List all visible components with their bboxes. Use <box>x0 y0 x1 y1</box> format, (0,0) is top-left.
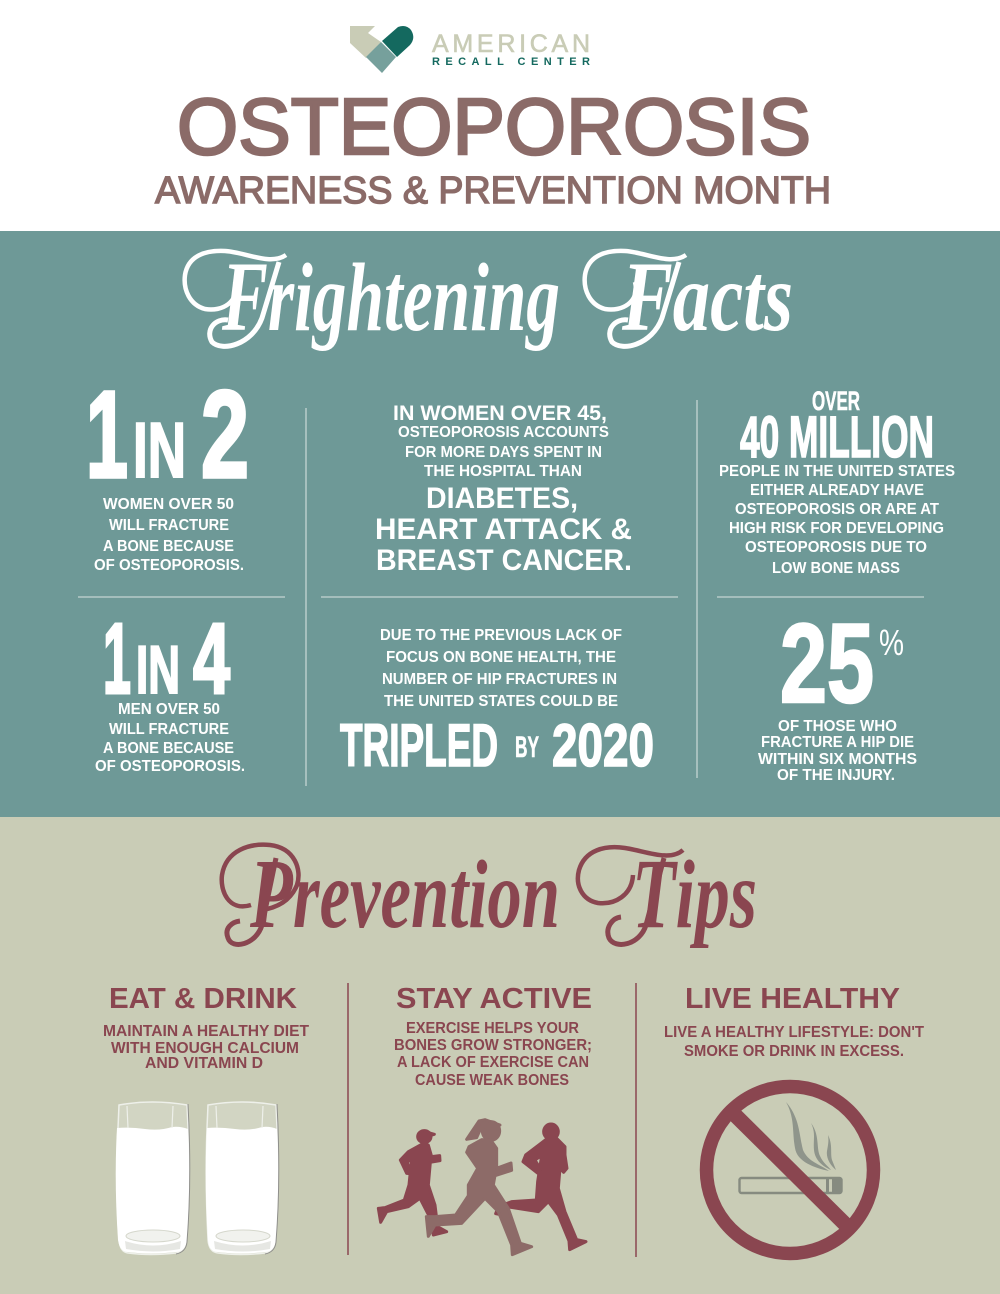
stat: 1 in 4 men: OF OSTEOPOROSIS. <box>95 758 245 775</box>
fact: tripled by 2020: DUE TO THE PREVIOUS LACK OF <box>380 627 622 644</box>
stat: over 40 million: OVER <box>812 386 860 416</box>
stat: 25 percent: WITHIN SIX MONTHS <box>758 751 917 768</box>
stat: 1 in 4 men: WILL FRACTURE <box>109 721 229 738</box>
column: eat and drink: WITH ENOUGH CALCIUM <box>111 1040 299 1057</box>
stat: 25 percent <box>758 601 917 784</box>
logo: American Recall Center: AMERICAN <box>432 30 590 58</box>
fact: tripled by 2020: NUMBER OF HIP FRACTURES IN <box>382 671 617 688</box>
column: stay active: EXERCISE HELPS YOUR <box>406 1020 579 1037</box>
column: live healthy: SMOKE OR DRINK IN EXCESS. <box>684 1043 904 1060</box>
column: eat and drink: MAINTAIN A HEALTHY DIET <box>103 1023 309 1040</box>
heading: Prevention Tips: Tips <box>632 838 757 949</box>
icon: no smoking <box>706 1086 874 1254</box>
fact: hospital days: DIABETES, <box>426 482 578 515</box>
icon: smoke <box>786 1102 836 1171</box>
logo: American Recall Center: RECALL CENTER <box>432 56 590 68</box>
stat: 1 in 4 men: 4 <box>193 603 230 715</box>
fact: tripled by 2020: THE UNITED STATES COULD BE <box>384 693 618 710</box>
stat: 1 in 4 men <box>95 603 245 775</box>
stat: 1 in 2 women: 1 <box>86 367 128 504</box>
stat: 1 in 2 women: WILL FRACTURE <box>109 517 229 534</box>
logo: American Recall Center <box>350 26 590 73</box>
fact: hospital days: HEART ATTACK & <box>375 513 632 546</box>
fact: hospital days <box>375 402 632 577</box>
panel: prevention tips <box>0 817 1000 1294</box>
fact: hospital days: IN WOMEN OVER 45, <box>393 402 607 425</box>
stat: over 40 million: OSTEOPOROSIS OR ARE AT <box>735 501 939 518</box>
icon: runner left <box>378 1131 447 1235</box>
fact: tripled by 2020: TRIPLED <box>340 712 498 779</box>
icon: runner right <box>496 1124 586 1250</box>
column: stay active: CAUSE WEAK BONES <box>415 1072 569 1089</box>
stat: 1 in 4 men: A BONE BECAUSE <box>103 740 234 757</box>
icon: right glass <box>206 1102 279 1254</box>
stat: over 40 million: OSTEOPOROSIS DUE TO <box>745 539 927 556</box>
stat: 25 percent: 25 <box>780 601 874 726</box>
heading: Frightening Facts: Facts <box>621 241 793 352</box>
stat: over 40 million <box>719 386 955 577</box>
fact: hospital days: OSTEOPOROSIS ACCOUNTS <box>398 424 609 441</box>
icon: left glass <box>116 1102 190 1254</box>
stat: 1 in 2 women: 2 <box>201 367 249 504</box>
stat: 25 percent: % <box>879 622 904 663</box>
fact: tripled by 2020: FOCUS ON BONE HEALTH, THE <box>386 649 616 666</box>
subtitle: Awareness and Prevention Month: AWARENESS & PREVENTION MONTH <box>155 170 831 212</box>
column: stay active: BONES GROW STRONGER; <box>394 1037 592 1054</box>
icon: cigarette <box>740 1178 842 1193</box>
column: eat and drink: EAT & DRINK <box>109 983 297 1015</box>
stat: 25 percent: OF THOSE WHO <box>778 718 897 735</box>
stat: over 40 million: HIGH RISK FOR DEVELOPING <box>729 520 944 537</box>
column: live healthy <box>664 983 924 1254</box>
fact: tripled by 2020: 2020 <box>552 712 654 779</box>
stat: 1 in 2 women: A BONE BECAUSE <box>103 538 234 555</box>
panel: frightening facts <box>0 231 1000 817</box>
stat: 1 in 2 women: OF OSTEOPOROSIS. <box>94 557 244 574</box>
fact: hospital days: BREAST CANCER. <box>376 544 632 577</box>
column: live healthy: LIVE A HEALTHY LIFESTYLE: DON'T <box>664 1024 924 1041</box>
icon: runners <box>378 1120 586 1255</box>
stat: 25 percent: FRACTURE A HIP DIE <box>761 734 914 751</box>
stat: 1 in 4 men: IN <box>136 632 180 708</box>
stat: 1 in 4 men: MEN OVER 50 <box>118 701 220 718</box>
stat: over 40 million: LOW BONE MASS <box>772 560 900 577</box>
fact: hospital days: THE HOSPITAL THAN <box>424 463 582 480</box>
icon: runner centre <box>426 1120 532 1255</box>
icon: prohibition sign <box>706 1086 874 1254</box>
column: eat and drink: AND VITAMIN D <box>145 1055 263 1072</box>
heading: Frightening Facts: Frightening <box>221 241 560 352</box>
stat: over 40 million: EITHER ALREADY HAVE <box>750 482 924 499</box>
fact: tripled by 2020: BY <box>515 731 539 764</box>
column: eat and drink <box>103 983 309 1254</box>
stat: 1 in 4 men: 1 <box>103 603 131 715</box>
fact: tripled by 2020 <box>340 627 654 779</box>
stat: 25 percent: OF THE INJURY. <box>777 767 895 784</box>
heading: Prevention Tips: Prevention <box>249 838 560 949</box>
stat: over 40 million: PEOPLE IN THE UNITED STATES <box>719 463 955 480</box>
column: stay active: A LACK OF EXERCISE CAN <box>397 1054 589 1071</box>
stat: 1 in 2 women: WOMEN OVER 50 <box>103 496 234 513</box>
column: stay active <box>378 983 592 1255</box>
column: stay active: STAY ACTIVE <box>396 983 592 1015</box>
stat: 1 in 2 women: IN <box>133 406 186 494</box>
title: Osteoporosis: OSTEOPOROSIS <box>177 82 811 171</box>
icon: glasses of milk <box>116 1102 279 1254</box>
column: live healthy: LIVE HEALTHY <box>685 983 900 1015</box>
stat: 1 in 2 women <box>86 367 249 574</box>
fact: hospital days: FOR MORE DAYS SPENT IN <box>405 444 602 461</box>
